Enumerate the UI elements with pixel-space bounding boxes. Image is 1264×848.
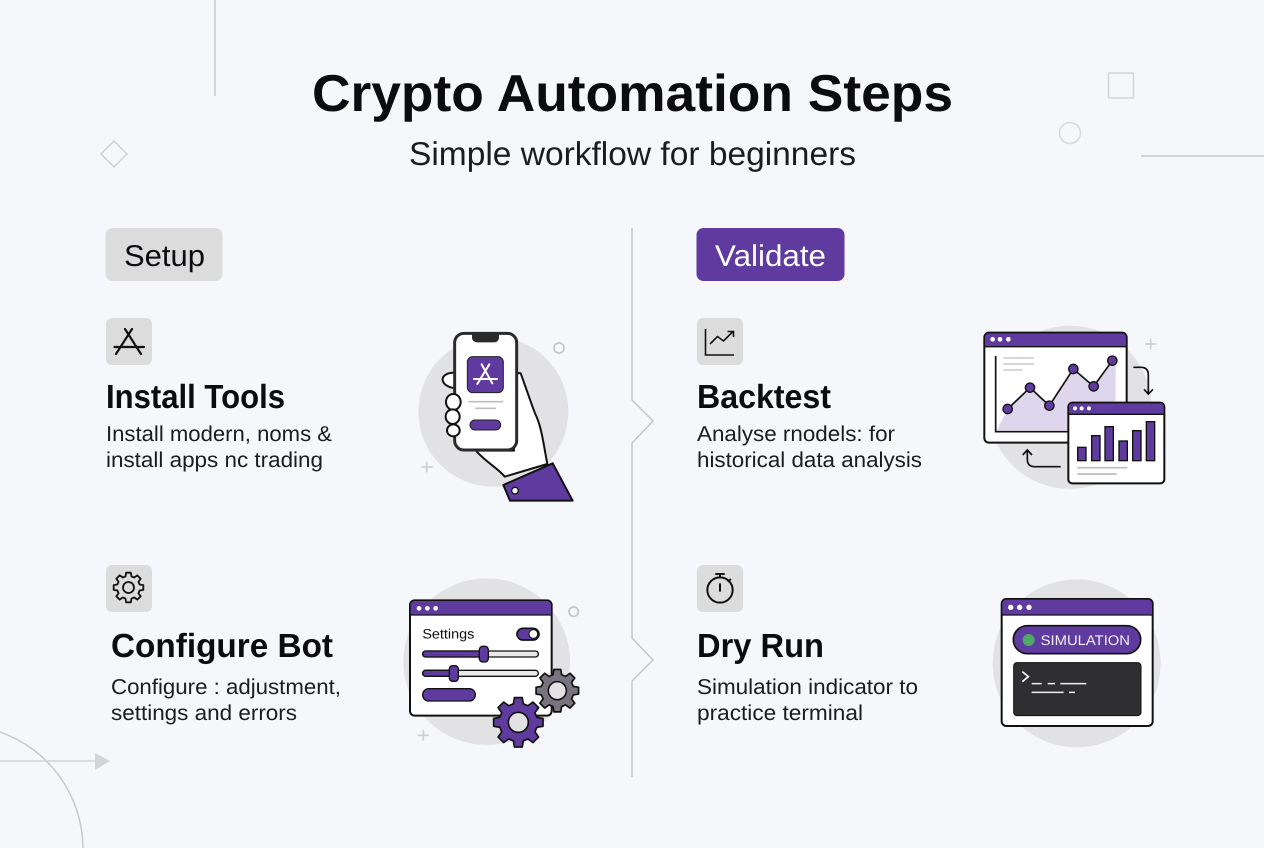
step: Install Tools (106, 318, 332, 472)
description: practice terminal (697, 701, 863, 725)
description (106, 422, 332, 472)
icon: gear (106, 565, 152, 612)
step: Configure Bot (106, 565, 341, 725)
illustration: settings window (403, 578, 579, 747)
description (697, 422, 922, 472)
description: historical data analysis (697, 448, 922, 472)
heading: Install Tools: Install Tools (106, 379, 285, 416)
illustration: simulation terminal: SIMULATION (1041, 632, 1130, 648)
description (697, 675, 918, 725)
section tag: Setup (106, 228, 222, 281)
section tag: Validate: Validate (715, 240, 826, 273)
illustration: simulation terminal (993, 579, 1161, 747)
description: settings and errors (111, 701, 297, 725)
step: Dry Run (697, 565, 918, 725)
heading: Configure Bot: Configure Bot (111, 628, 333, 665)
description: Simulation indicator to (697, 675, 918, 699)
description: install apps nc trading (106, 448, 323, 472)
section tag: Validate (696, 228, 844, 281)
illustration: phone in hand (418, 333, 573, 501)
heading: Dry Run: Dry Run (697, 628, 824, 665)
icon: app store (106, 318, 152, 365)
title: Crypto Automation Steps (312, 65, 953, 123)
description: Analyse rnodels: for (697, 422, 895, 446)
subtitle: Simple workflow for beginners (409, 135, 856, 172)
illustration: backtest charts (984, 326, 1164, 489)
heading: Backtest: Backtest (697, 379, 831, 416)
step: Backtest (697, 318, 922, 472)
icon: stopwatch (697, 565, 743, 612)
illustration: settings window: Settings (422, 626, 474, 641)
description: Install modern, noms & (106, 422, 332, 446)
description (111, 675, 341, 725)
icon: line chart (697, 318, 743, 365)
section tag: Setup: Setup (124, 240, 205, 273)
description: Configure : adjustment, (111, 675, 341, 699)
